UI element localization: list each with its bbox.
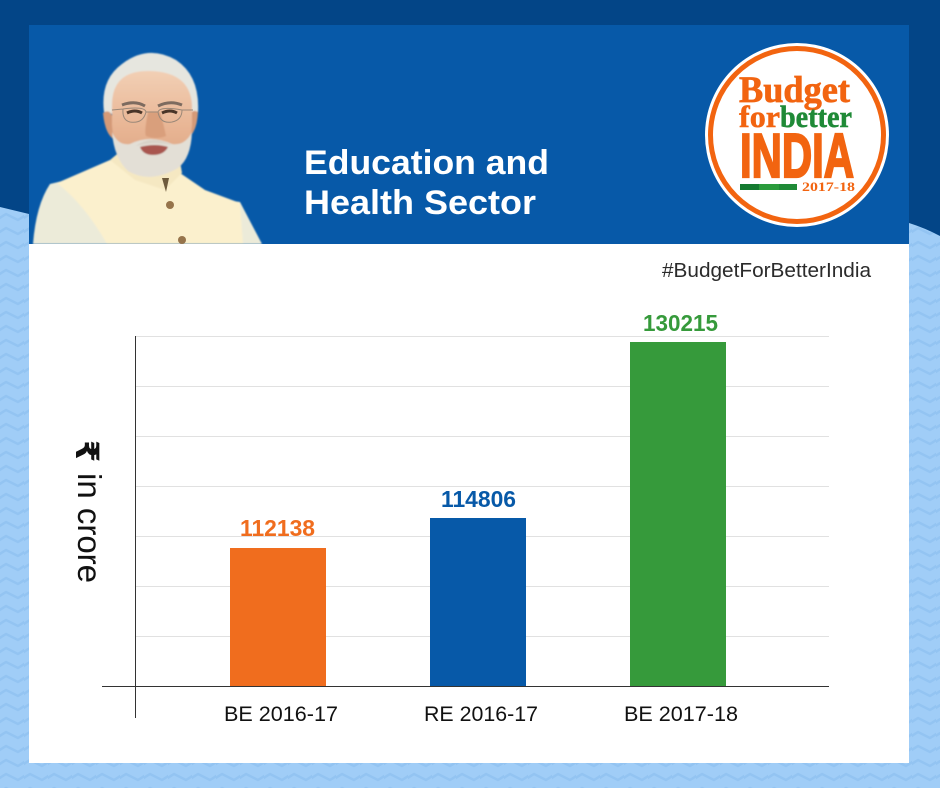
portrait illustration — [33, 53, 262, 244]
heading: Education and — [304, 144, 549, 182]
eyebrows and glasses — [112, 103, 193, 122]
category labels: BE 2016-17 — [224, 703, 338, 726]
axes — [102, 336, 829, 718]
bar chart — [102, 310, 829, 726]
mouth — [140, 145, 168, 155]
wavy light blue background — [0, 207, 940, 788]
face — [110, 70, 193, 146]
logo badge: 2017-18 — [802, 180, 855, 194]
y-axis label: ₹ — [68, 440, 106, 462]
category labels: BE 2017-18 — [624, 703, 738, 726]
vest — [57, 160, 243, 244]
y-axis label: in crore — [71, 473, 108, 583]
kurta sleeves — [33, 178, 262, 244]
ears — [103, 111, 115, 140]
beard — [112, 132, 192, 177]
logo badge — [705, 43, 889, 227]
value labels: 112138 — [240, 515, 315, 541]
heading: Health Sector — [304, 184, 536, 222]
value labels: 130215 — [643, 310, 718, 336]
logo badge: better — [780, 99, 852, 134]
value labels: 114806 — [441, 486, 516, 512]
nose shadow — [145, 112, 166, 138]
category labels: RE 2016-17 — [424, 703, 538, 726]
category labels — [224, 703, 738, 726]
hashtag: #BudgetForBetterIndia — [662, 260, 872, 282]
moustache — [140, 140, 168, 145]
logo badge: Budget — [739, 70, 851, 111]
value labels — [240, 310, 718, 541]
buttons — [166, 201, 174, 209]
header banner — [29, 25, 909, 244]
hair — [103, 53, 198, 114]
bar: BE 2016-17 — [230, 548, 326, 686]
heading — [304, 144, 549, 222]
logo badge: INDIA — [740, 122, 854, 191]
logo badge: for — [739, 99, 780, 134]
bar: RE 2016-17 — [430, 518, 526, 686]
neck — [110, 150, 182, 190]
neck opening — [162, 178, 169, 192]
bar: BE 2017-18 — [630, 342, 726, 686]
white content panel — [29, 244, 909, 763]
